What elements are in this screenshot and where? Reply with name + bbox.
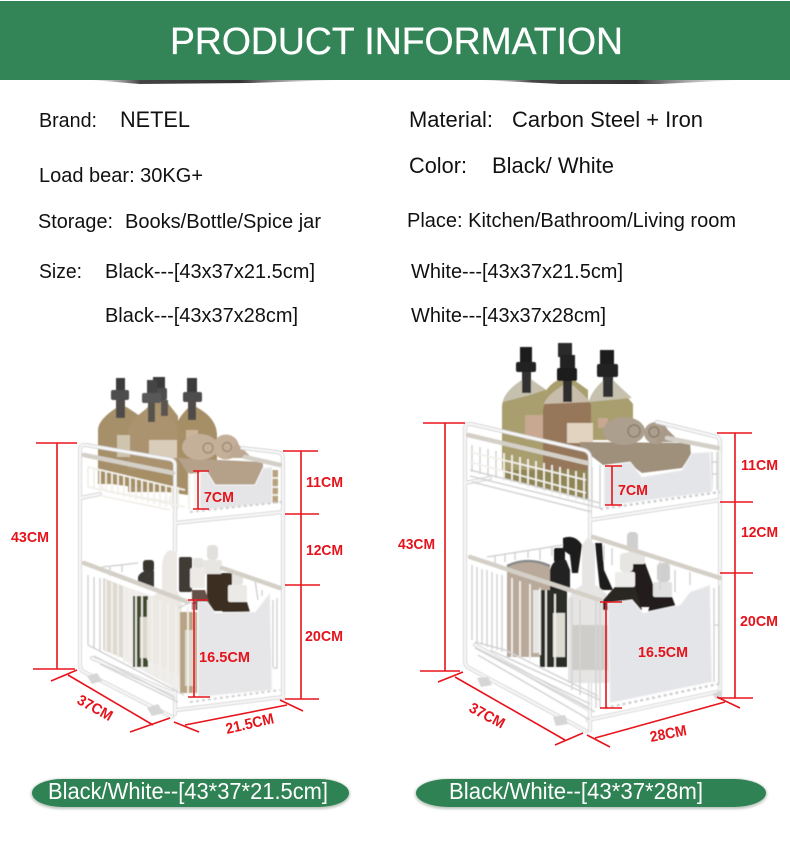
top basket rails and wires [84, 455, 280, 510]
rack frame [465, 422, 720, 731]
bottles on top shelf [98, 377, 217, 495]
dimension lines: 21.5cm rack: 11CM [306, 474, 343, 491]
dimension lines: 21.5cm rack: 12CM [306, 542, 343, 559]
product photo: 28cm rack [465, 343, 722, 731]
towels [580, 417, 691, 473]
bottom basket rails and wires [470, 537, 720, 720]
bottles on top shelf [502, 343, 633, 500]
bottom basket contents [103, 545, 250, 693]
dimension lines: 28cm rack: 20CM [740, 613, 778, 630]
bottom basket front panel [608, 585, 712, 703]
product specifications text: Black---[43x37x28cm] [105, 305, 298, 327]
dimension lines: 21.5cm rack: 43CM [11, 529, 49, 546]
rack frame [80, 445, 283, 717]
product specifications text: Storage: [38, 211, 113, 233]
dimension lines: 28cm rack: 43CM [398, 536, 435, 553]
bottom basket front panel [198, 593, 272, 697]
product specifications text: Black---[43x37x21.5cm] [105, 261, 315, 283]
product specifications text: Brand: [39, 110, 97, 132]
dimension lines: 21.5cm rack: 37CM [74, 692, 116, 725]
rubber feet [87, 673, 164, 716]
dimension lines: 28cm rack: 37CM [466, 700, 508, 732]
dimension lines: 28cm rack: 16.5CM [638, 644, 688, 661]
product specifications text: NETEL [120, 107, 190, 132]
product specifications text: Load bear: 30KG+ [39, 165, 203, 187]
dimension lines: 28cm rack: 12CM [741, 524, 778, 541]
product specifications text: Color: [409, 153, 467, 178]
dimension lines: 21.5cm rack: 21.5CM [224, 710, 276, 738]
product specifications text: Black/ White [492, 153, 614, 178]
bottom basket rails and wires [84, 563, 280, 702]
product photo: 21.5cm rack [80, 377, 283, 717]
dimension lines: 21.5cm rack: 7CM [204, 489, 234, 506]
size pill: 28cm: Black/White--[43*37*28m] [449, 778, 703, 804]
dimension lines: 21.5cm rack: 20CM [305, 628, 343, 645]
top basket front panel [200, 467, 272, 510]
towels [178, 434, 263, 485]
title: PRODUCT INFORMATION [170, 21, 623, 63]
dimension lines: 28cm rack: 7CM [618, 482, 648, 499]
header banner [0, 1, 790, 84]
product specifications text: White---[43x37x28cm] [411, 305, 606, 327]
product specifications text: White---[43x37x21.5cm] [411, 261, 623, 283]
dimension lines: 21.5cm rack [11, 443, 343, 738]
size pill: 21.5cm: Black/White--[43*37*21.5cm] [48, 778, 328, 804]
dimension lines: 21.5cm rack: 16.5CM [199, 649, 250, 666]
product specifications text: Place: Kitchen/Bathroom/Living room [407, 210, 736, 232]
product specifications text: Books/Bottle/Spice jar [125, 211, 321, 233]
top basket front panel [604, 452, 712, 506]
top basket rails and wires [468, 435, 718, 512]
size pill: 28cm [415, 778, 767, 809]
product specifications text: Carbon Steel + Iron [512, 107, 703, 132]
dimension lines: 28cm rack [398, 423, 778, 747]
product specifications text: Size: [39, 261, 82, 283]
product specifications text [38, 107, 736, 327]
product specifications text: Material: [409, 107, 493, 132]
bottom basket contents [507, 532, 677, 683]
rubber feet [477, 677, 722, 726]
dimension lines: 28cm rack: 28CM [649, 722, 688, 746]
dimension lines: 28cm rack: 11CM [741, 457, 778, 474]
